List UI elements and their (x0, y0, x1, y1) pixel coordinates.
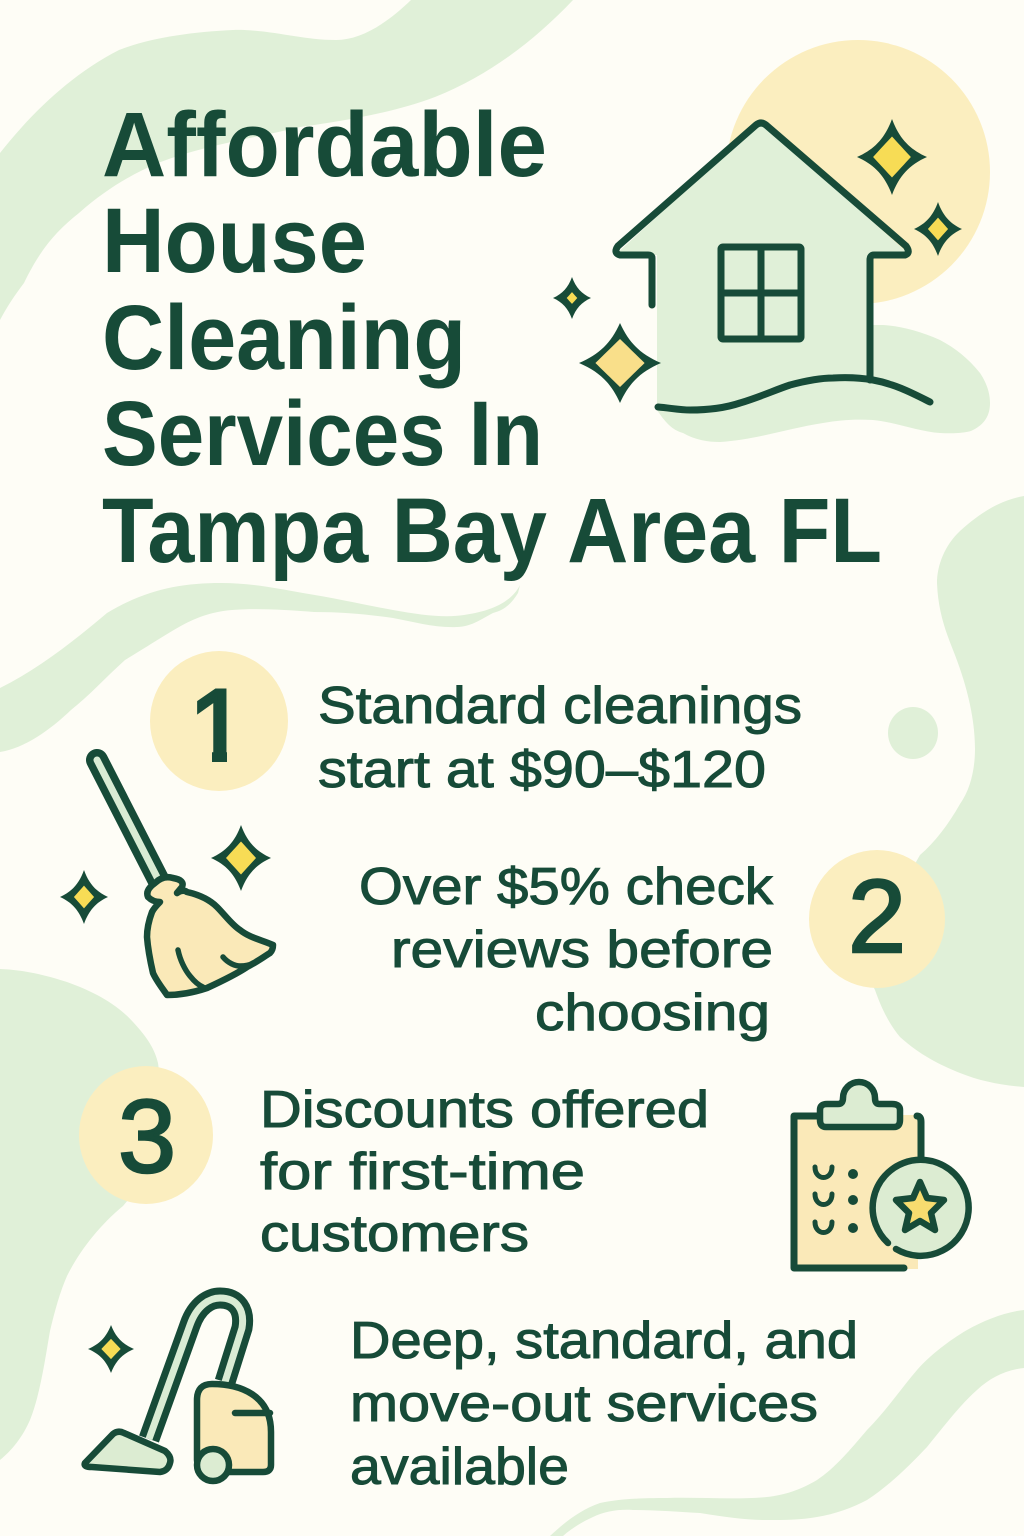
step 2 number badge (809, 850, 945, 988)
sparkle (857, 119, 927, 195)
sparkle (914, 202, 962, 256)
icon: clipboard with star badge (793, 1082, 969, 1269)
sparkle (553, 277, 591, 319)
step 4 text: Deep, standard, and (350, 1312, 858, 1370)
sparkle (88, 1325, 134, 1373)
step 2 text: Over $5% check (359, 858, 774, 916)
step 3 text: for first-time (260, 1143, 585, 1201)
step 2 text: reviews before (391, 921, 773, 979)
sparkle (211, 825, 271, 891)
title (102, 94, 882, 582)
sparkle (579, 323, 661, 403)
step 4 text (350, 1312, 858, 1496)
checklist marks (815, 1167, 858, 1233)
icon: vacuum cleaner with sparkle (85, 1298, 271, 1481)
icon: broom with sparkles (60, 760, 273, 995)
step 1 text: start at $90–$120 (318, 741, 766, 799)
title: Services In (102, 383, 543, 485)
step 2 text (359, 858, 774, 1042)
step 1 text (318, 677, 802, 799)
title: Cleaning (102, 287, 466, 389)
icon: house with sparkles (553, 40, 990, 442)
step 1 number badge: 1 (189, 669, 247, 785)
step 3 number badge: 3 (118, 1079, 176, 1195)
step 3 text: customers (260, 1205, 529, 1263)
title: House (102, 190, 367, 292)
step 3 number badge (79, 1066, 213, 1204)
step 1 number badge (150, 651, 288, 791)
step 2 number badge: 2 (848, 859, 906, 975)
step 2 text: choosing (535, 984, 770, 1042)
step 3 text (260, 1081, 709, 1263)
step 3 text: Discounts offered (260, 1081, 709, 1139)
title: Tampa Bay Area FL (102, 480, 882, 582)
sparkle (60, 870, 108, 924)
step 4 text: move-out services (350, 1375, 818, 1433)
step 4 text: available (350, 1438, 569, 1496)
star badge (873, 1160, 969, 1256)
window (721, 247, 801, 339)
title: Affordable (102, 94, 547, 196)
step 1 text: Standard cleanings (318, 677, 802, 735)
